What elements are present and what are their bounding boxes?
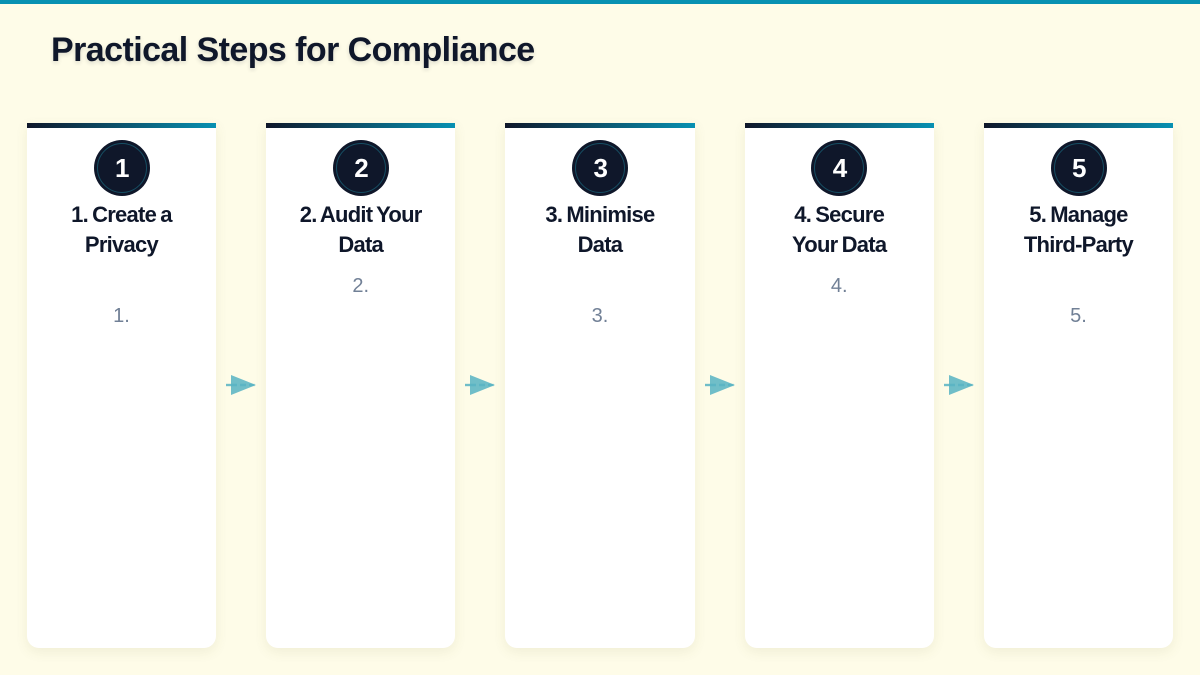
step 3 heading	[545, 202, 654, 257]
panel: step 3	[505, 123, 695, 648]
card 5 gradient top bar	[984, 123, 1173, 128]
panel: step 5	[984, 123, 1173, 648]
arrow: step 1 to 2	[226, 375, 256, 395]
card 2 gradient top bar	[266, 123, 455, 128]
step 1 number badge	[94, 140, 150, 196]
card 1 gradient top bar	[27, 123, 216, 128]
step 2 number badge: 2	[354, 153, 369, 183]
step 3 number badge: 3	[594, 153, 608, 183]
step 5 number badge: 5	[1072, 153, 1086, 183]
step 1 heading: Privacy	[85, 232, 158, 257]
step 3 heading: 3. Minimise	[545, 202, 654, 227]
card 4 gradient top bar	[745, 123, 934, 128]
step 5 heading: Third-Party	[1024, 232, 1133, 257]
step 1 description: 1.	[113, 305, 130, 327]
step 3 description: 3.	[592, 305, 608, 327]
arrow: step 2 to 3	[465, 375, 495, 395]
step 4 number badge	[811, 140, 867, 196]
step 2 heading: 2. Audit Your	[300, 202, 422, 227]
step 4 description: 4.	[831, 275, 848, 297]
step 5 number badge	[1051, 140, 1107, 196]
step 2 number badge	[333, 140, 389, 196]
step 2 heading: Data	[338, 232, 383, 257]
step 4 heading: Your Data	[792, 232, 886, 257]
step 4 heading: 4. Secure	[794, 202, 884, 227]
step 3 number badge	[572, 140, 628, 196]
step 5 heading: 5. Manage	[1029, 202, 1128, 227]
title: Practical Steps for Compliance	[51, 31, 535, 69]
arrow: step 4 to 5	[944, 375, 974, 395]
arrow: step 3 to 4	[705, 375, 735, 395]
step 1 number badge: 1	[115, 153, 129, 183]
step 5 description: 5.	[1070, 305, 1087, 327]
step 5 heading	[1024, 202, 1134, 257]
top accent bar	[0, 0, 1200, 4]
step 1 heading	[71, 202, 173, 257]
step 4 heading	[792, 202, 888, 257]
step 2 heading	[300, 202, 422, 257]
panel: step 2	[266, 123, 455, 648]
card 3 gradient top bar	[505, 123, 695, 128]
step 2 description: 2.	[352, 275, 369, 297]
step 4 number badge: 4	[833, 153, 847, 183]
panel: step 1	[27, 123, 216, 648]
panel: step 4	[745, 123, 934, 648]
step 3 heading: Data	[578, 232, 622, 257]
step 1 heading: 1. Create a	[71, 202, 172, 227]
